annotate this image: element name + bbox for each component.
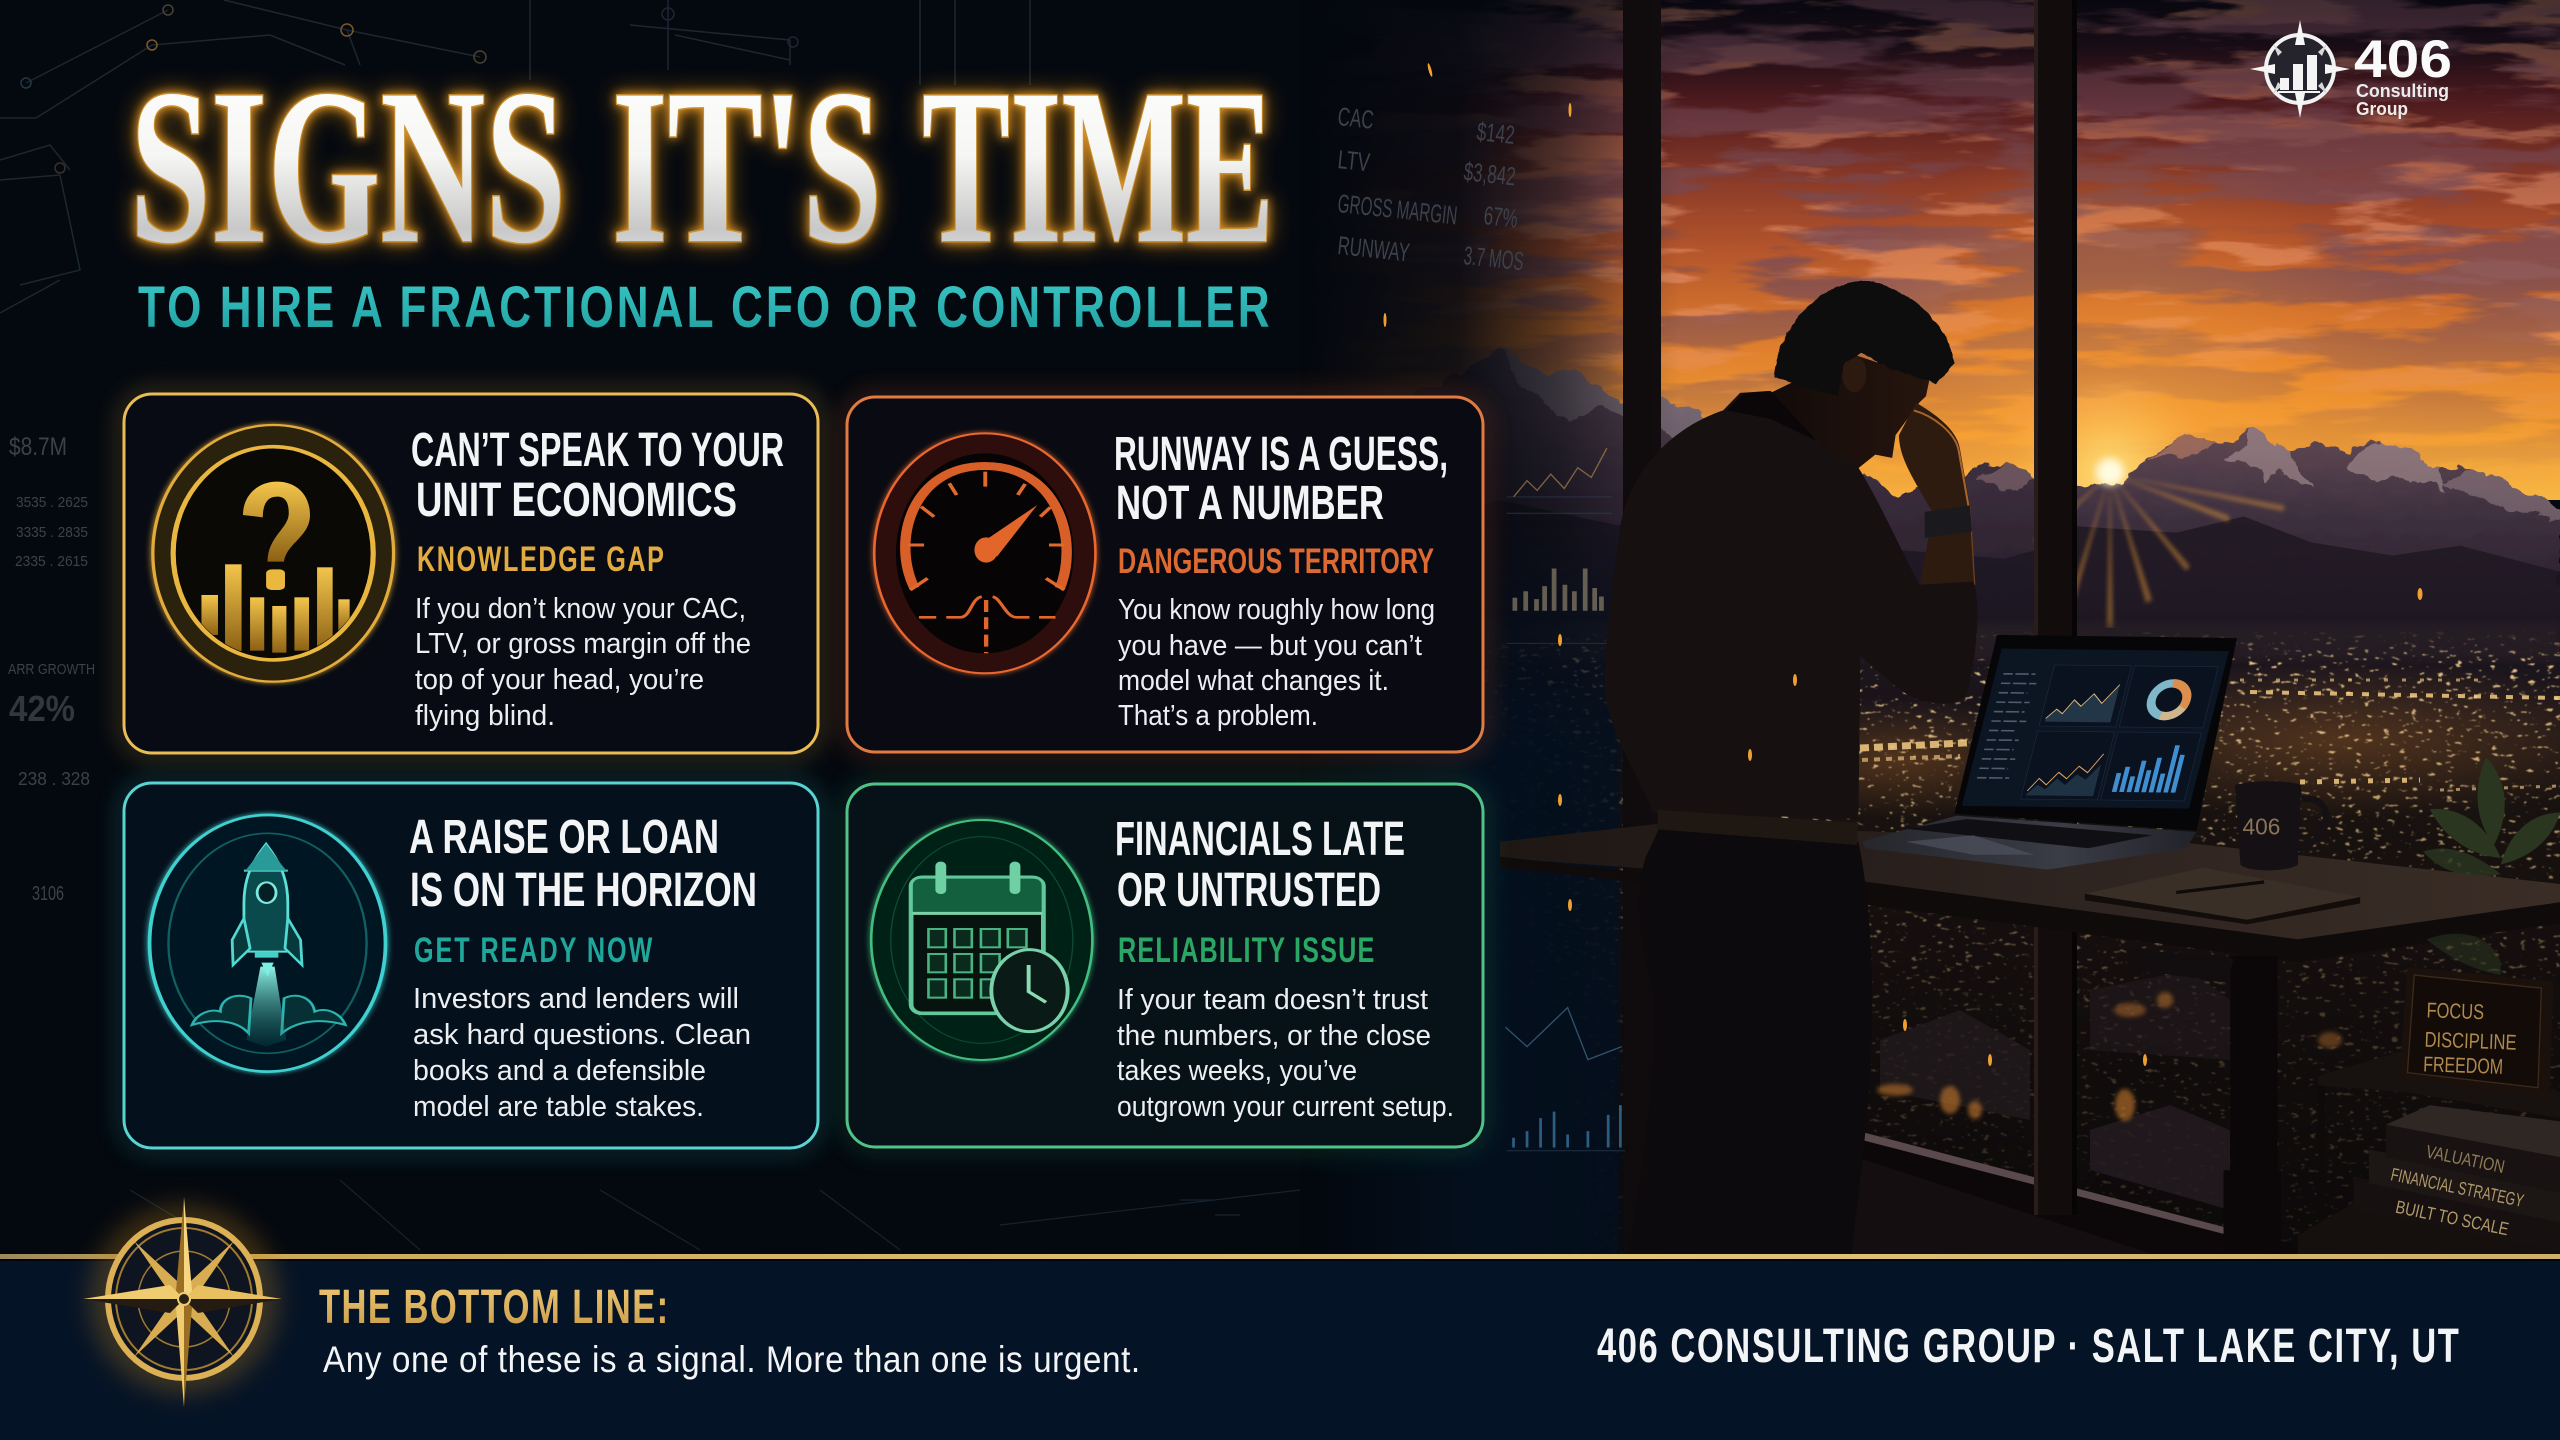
card body: the numbers, or the close bbox=[1117, 1020, 1431, 1052]
sun bbox=[2097, 459, 2123, 485]
card tag: DANGEROUS TERRITORY bbox=[1118, 542, 1434, 581]
icon: rocket bbox=[150, 815, 385, 1072]
faint data figures, left edge: 3106 bbox=[32, 883, 64, 905]
logo: 406 Consulting Group: Group bbox=[2356, 99, 2408, 119]
title: IT'S bbox=[612, 44, 882, 290]
card tag: KNOWLEDGE GAP bbox=[417, 540, 664, 579]
notebook and pen bbox=[2085, 868, 2360, 924]
faint data figures, left edge: 2335 . 2615 bbox=[15, 553, 88, 570]
city at night bbox=[1618, 628, 2560, 1244]
card heading: OR UNTRUSTED bbox=[1117, 864, 1381, 917]
faint data figures, left edge bbox=[8, 433, 95, 905]
title bbox=[130, 44, 1274, 290]
card heading: NOT A NUMBER bbox=[1116, 477, 1384, 530]
window mullions bbox=[1623, 0, 2077, 1260]
faint data table, top right of title: CAC bbox=[1336, 101, 1375, 135]
card heading: RUNWAY IS A GUESS, bbox=[1114, 428, 1448, 481]
bottom line statement: Any one of these is a signal. More than one is urgent. bbox=[323, 1339, 1140, 1380]
card body: outgrown your current setup. bbox=[1117, 1091, 1454, 1123]
laptop bbox=[1862, 635, 2237, 870]
panel: runway bbox=[847, 397, 1483, 752]
faint data table, top right of title: 67% bbox=[1482, 200, 1519, 234]
photo: sunset view from window with stressed man at desk bbox=[1300, 0, 2560, 1270]
shelf and motto sign: FOCUS bbox=[2426, 998, 2485, 1024]
left fade to dark bbox=[1300, 0, 1669, 1096]
clouds bbox=[1469, 0, 2560, 466]
faint data table, top right of title: GROSS MARGIN bbox=[1336, 188, 1459, 231]
card body: top of your head, you’re bbox=[415, 664, 704, 696]
panel: raise or loan bbox=[124, 783, 818, 1148]
stacked books: BUILT TO SCALE bbox=[2394, 1196, 2511, 1239]
house lights below desk bbox=[1877, 992, 2342, 1121]
faint circuit lines, top left bbox=[0, 0, 1030, 313]
card body: If you don’t know your CAC, bbox=[415, 593, 746, 625]
window sill and floor bbox=[1863, 1143, 2298, 1254]
man silhouette bbox=[1605, 280, 1977, 1255]
card tag: GET READY NOW bbox=[414, 931, 653, 970]
logo: 406 Consulting Group bbox=[2250, 20, 2452, 119]
card tag: RELIABILITY ISSUE bbox=[1118, 931, 1374, 970]
shelf and motto sign bbox=[2318, 967, 2560, 1216]
shelf and motto sign: DISCIPLINE bbox=[2424, 1027, 2517, 1055]
faint data table, top right of title: $3,842 bbox=[1462, 156, 1517, 191]
panel: late financials bbox=[847, 784, 1483, 1147]
potted plant bbox=[2423, 757, 2560, 975]
card heading bbox=[1115, 813, 1405, 917]
card body: you have — but you can’t bbox=[1118, 630, 1422, 662]
stacked books: VALUATION bbox=[2424, 1141, 2507, 1177]
faint data figures, left edge: 238 . 328 bbox=[18, 769, 90, 789]
faint data figures, lower left bbox=[130, 1180, 1300, 1250]
icon: speedometer bbox=[874, 433, 1095, 673]
card body bbox=[413, 983, 751, 1123]
card body bbox=[1117, 984, 1454, 1123]
faint data table, top right of title: $142 bbox=[1475, 116, 1516, 150]
icon: gold compass bbox=[83, 1197, 282, 1407]
card body: flying blind. bbox=[415, 700, 555, 732]
card heading bbox=[409, 811, 757, 917]
sky bbox=[1300, 0, 2560, 500]
bottom banner bbox=[0, 1254, 2560, 1440]
card heading: UNIT ECONOMICS bbox=[416, 474, 737, 527]
card body: ask hard questions. Clean bbox=[413, 1019, 751, 1051]
card body bbox=[1118, 594, 1435, 732]
panel: unit economics bbox=[124, 394, 818, 753]
firm name and location: 406 CONSULTING GROUP · SALT LAKE CITY, UT bbox=[1597, 1318, 2459, 1372]
card heading: IS ON THE HORIZON bbox=[410, 864, 757, 917]
subtitle: TO HIRE A FRACTIONAL CFO OR CONTROLLER bbox=[138, 274, 1270, 339]
stacked books bbox=[2298, 1105, 2560, 1255]
faint data charts on window bbox=[1505, 448, 1625, 1151]
faint data figures, left edge: 3535 . 2625 bbox=[16, 494, 88, 511]
card body: Investors and lenders will bbox=[413, 983, 739, 1015]
faint data table, top right of title: 3.7 MOS bbox=[1462, 240, 1525, 276]
bottom line heading: THE BOTTOM LINE: bbox=[319, 1279, 668, 1333]
faint data figures, left edge: 42% bbox=[9, 688, 75, 729]
shelf and motto sign: FREEDOM bbox=[2423, 1052, 2503, 1079]
card body: model are table stakes. bbox=[413, 1091, 704, 1123]
sun glow bbox=[1864, 174, 2356, 516]
faint data table, top right of title: RUNWAY bbox=[1336, 230, 1411, 267]
man and desk in scene coordinates bbox=[1500, 280, 2560, 1255]
card body: You know roughly how long bbox=[1118, 594, 1435, 626]
card body: model what changes it. bbox=[1118, 665, 1389, 697]
embers foreground bbox=[1748, 674, 1797, 761]
title: SIGNS bbox=[130, 44, 566, 290]
navy data panel bbox=[1388, 624, 1623, 1254]
logo: 406 Consulting Group: 406 bbox=[2354, 30, 2452, 89]
icon: calendar with clock bbox=[871, 820, 1092, 1060]
card body: takes weeks, you’ve bbox=[1117, 1055, 1357, 1087]
card body: books and a defensible bbox=[413, 1055, 706, 1087]
bright city light rows bbox=[1860, 680, 2560, 790]
coffee mug: 406 bbox=[2242, 814, 2280, 840]
faint data table, top right of title bbox=[1336, 101, 1525, 276]
card heading bbox=[411, 424, 784, 527]
faint data figures, left edge: ARR GROWTH bbox=[8, 661, 95, 678]
coffee mug bbox=[2235, 781, 2326, 870]
title: TIME bbox=[922, 44, 1274, 290]
warm city haze bbox=[2204, 672, 2560, 808]
card body: If your team doesn’t trust bbox=[1117, 984, 1428, 1016]
mountains in scene coordinates bbox=[1420, 347, 2560, 628]
card heading: CAN’T SPEAK TO YOUR bbox=[411, 424, 784, 477]
faint data table, top right of title: LTV bbox=[1336, 144, 1372, 177]
logo: 406 Consulting Group: Consulting bbox=[2356, 81, 2449, 101]
card body: That’s a problem. bbox=[1118, 700, 1318, 732]
faint data figures, left edge: $8.7M bbox=[9, 433, 67, 461]
card body: LTV, or gross margin off the bbox=[415, 628, 751, 660]
card heading: FINANCIALS LATE bbox=[1115, 813, 1405, 866]
donut chart on laptop bbox=[2147, 683, 2191, 716]
embers bbox=[1384, 63, 2422, 1066]
card body bbox=[415, 593, 751, 732]
rooftops below desk bbox=[1880, 970, 2230, 1210]
sun rays bbox=[2034, 474, 2285, 630]
faint data figures, left edge: 3335 . 2835 bbox=[16, 524, 88, 541]
card heading bbox=[1114, 428, 1448, 530]
icon: question mark over bars bbox=[153, 425, 394, 682]
desk bbox=[1500, 824, 2560, 1255]
card heading: A RAISE OR LOAN bbox=[409, 811, 719, 864]
